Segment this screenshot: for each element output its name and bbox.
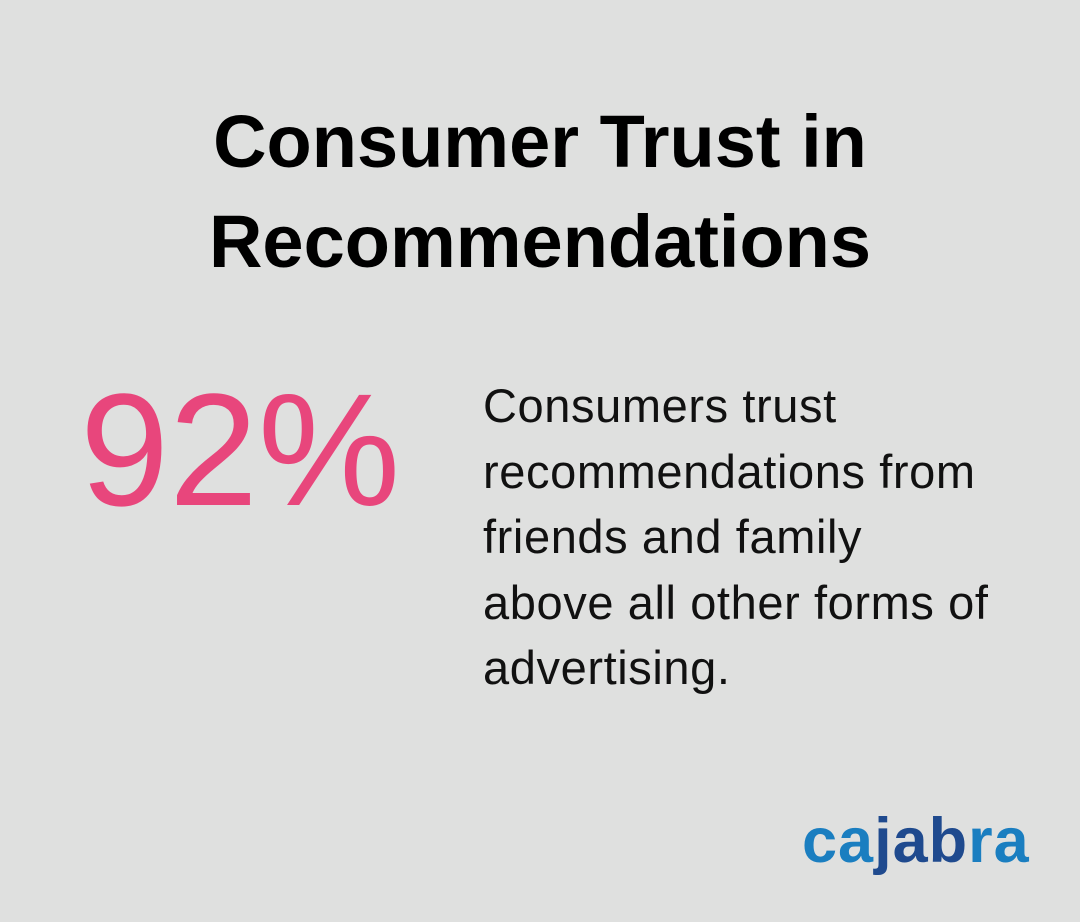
description text: friends and family: [483, 510, 862, 563]
description text: above all other forms of: [483, 576, 989, 628]
title: Consumer Trust in: [213, 100, 867, 183]
description text: [483, 379, 989, 694]
logo: cajabra: [802, 806, 1030, 876]
title: [209, 100, 871, 283]
description text: advertising.: [483, 641, 731, 694]
description text: recommendations from: [483, 444, 976, 498]
big stat: 92%: [80, 360, 400, 539]
description text: Consumers trust: [483, 379, 837, 432]
title: Recommendations: [209, 200, 871, 283]
